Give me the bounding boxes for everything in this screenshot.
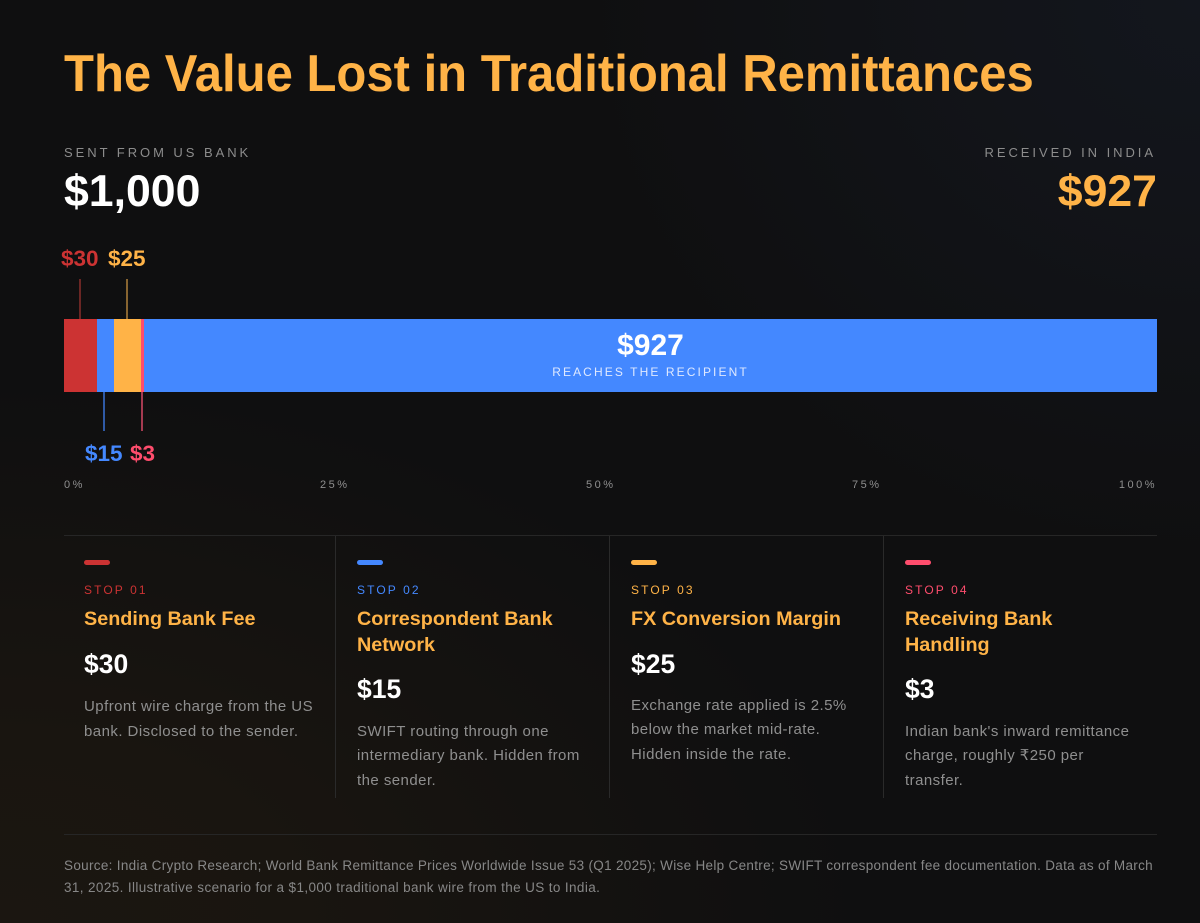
- axis: 25%: 25%: [320, 479, 350, 491]
- stop description: intermediary bank. Hidden from: [357, 747, 580, 764]
- stop description: [84, 698, 313, 740]
- colour dash: [357, 560, 383, 565]
- axis: 75%: 75%: [852, 479, 882, 491]
- panel: stop 03: [631, 560, 847, 763]
- stop description: [631, 697, 847, 763]
- stop description: the sender.: [357, 772, 436, 789]
- callout: $25 leader line: [126, 279, 128, 319]
- stop heading: Correspondent Bank: [357, 608, 553, 630]
- stop heading: Handling: [905, 634, 990, 656]
- stop description: below the market mid-rate.: [631, 721, 820, 738]
- stop heading: Network: [357, 634, 435, 656]
- stop label: STOP 03: [631, 583, 695, 597]
- stop description: Upfront wire charge from the US: [84, 698, 313, 715]
- stacked bar: [64, 319, 1157, 392]
- received label: RECEIVED IN INDIA: [984, 145, 1156, 160]
- stop heading: [357, 608, 553, 656]
- stop description: [357, 723, 580, 789]
- segment: sending bank fee: [64, 319, 97, 392]
- stop heading: FX Conversion Margin: [631, 608, 841, 630]
- callout: $30 leader line: [79, 279, 81, 319]
- stop description: transfer.: [905, 772, 963, 789]
- axis: 100%: 100%: [1119, 479, 1157, 491]
- callout: $25 label: $25: [108, 246, 146, 271]
- segment: receiving bank: [141, 319, 144, 392]
- segment: fx margin: [114, 319, 141, 392]
- stop label: STOP 01: [84, 583, 148, 597]
- stop label: STOP 02: [357, 583, 421, 597]
- callout: $30 label: $30: [61, 246, 99, 271]
- source note: [64, 858, 1153, 895]
- sent label: SENT FROM US BANK: [64, 145, 251, 160]
- stop amount: $30: [84, 649, 128, 679]
- panel: stop 01: [84, 560, 313, 740]
- callout: $3 leader line: [141, 392, 143, 431]
- stop description: [905, 723, 1129, 789]
- colour dash: [631, 560, 657, 565]
- stop description: Indian bank's inward remittance: [905, 723, 1129, 740]
- callout: $15 leader line: [103, 392, 105, 431]
- axis: 50%: 50%: [586, 479, 616, 491]
- bar value: $927: [617, 329, 684, 362]
- bar caption: REACHES THE RECIPIENT: [552, 365, 749, 379]
- colour dash: [84, 560, 110, 565]
- panel: stop 04: [905, 560, 1129, 789]
- stop description: SWIFT routing through one: [357, 723, 549, 740]
- source note: Source: India Crypto Research; World Bank Remittance Prices Worldwide Issue 53 (Q1 2025); Wise Help Centre; SWIFT correspondent fee documentation. Data as of March: [64, 858, 1153, 873]
- colour dash: [905, 560, 931, 565]
- stop label: STOP 04: [905, 583, 969, 597]
- stop description: bank. Disclosed to the sender.: [84, 723, 298, 740]
- callout: $3 label: $3: [130, 441, 155, 466]
- stop heading: [905, 608, 1052, 656]
- stop description: Hidden inside the rate.: [631, 746, 791, 763]
- stop amount: $3: [905, 674, 934, 704]
- sent amount: $1,000: [64, 167, 200, 216]
- axis: 0%: 0%: [64, 479, 85, 491]
- callout: $15 label: $15: [85, 441, 123, 466]
- segment: correspondent bank: [97, 319, 114, 392]
- title: The Value Lost in Traditional Remittances: [64, 45, 1034, 103]
- stop description: Exchange rate applied is 2.5%: [631, 697, 847, 714]
- panel: stop 02: [357, 560, 580, 789]
- stop description: charge, roughly ₹250 per: [905, 747, 1084, 764]
- received amount: $927: [1058, 167, 1157, 216]
- source note: 31, 2025. Illustrative scenario for a $1,000 traditional bank wire from the US to India.: [64, 880, 600, 895]
- stop amount: $15: [357, 674, 401, 704]
- stop amount: $25: [631, 649, 675, 679]
- stop heading: Sending Bank Fee: [84, 608, 255, 630]
- stop heading: Receiving Bank: [905, 608, 1052, 630]
